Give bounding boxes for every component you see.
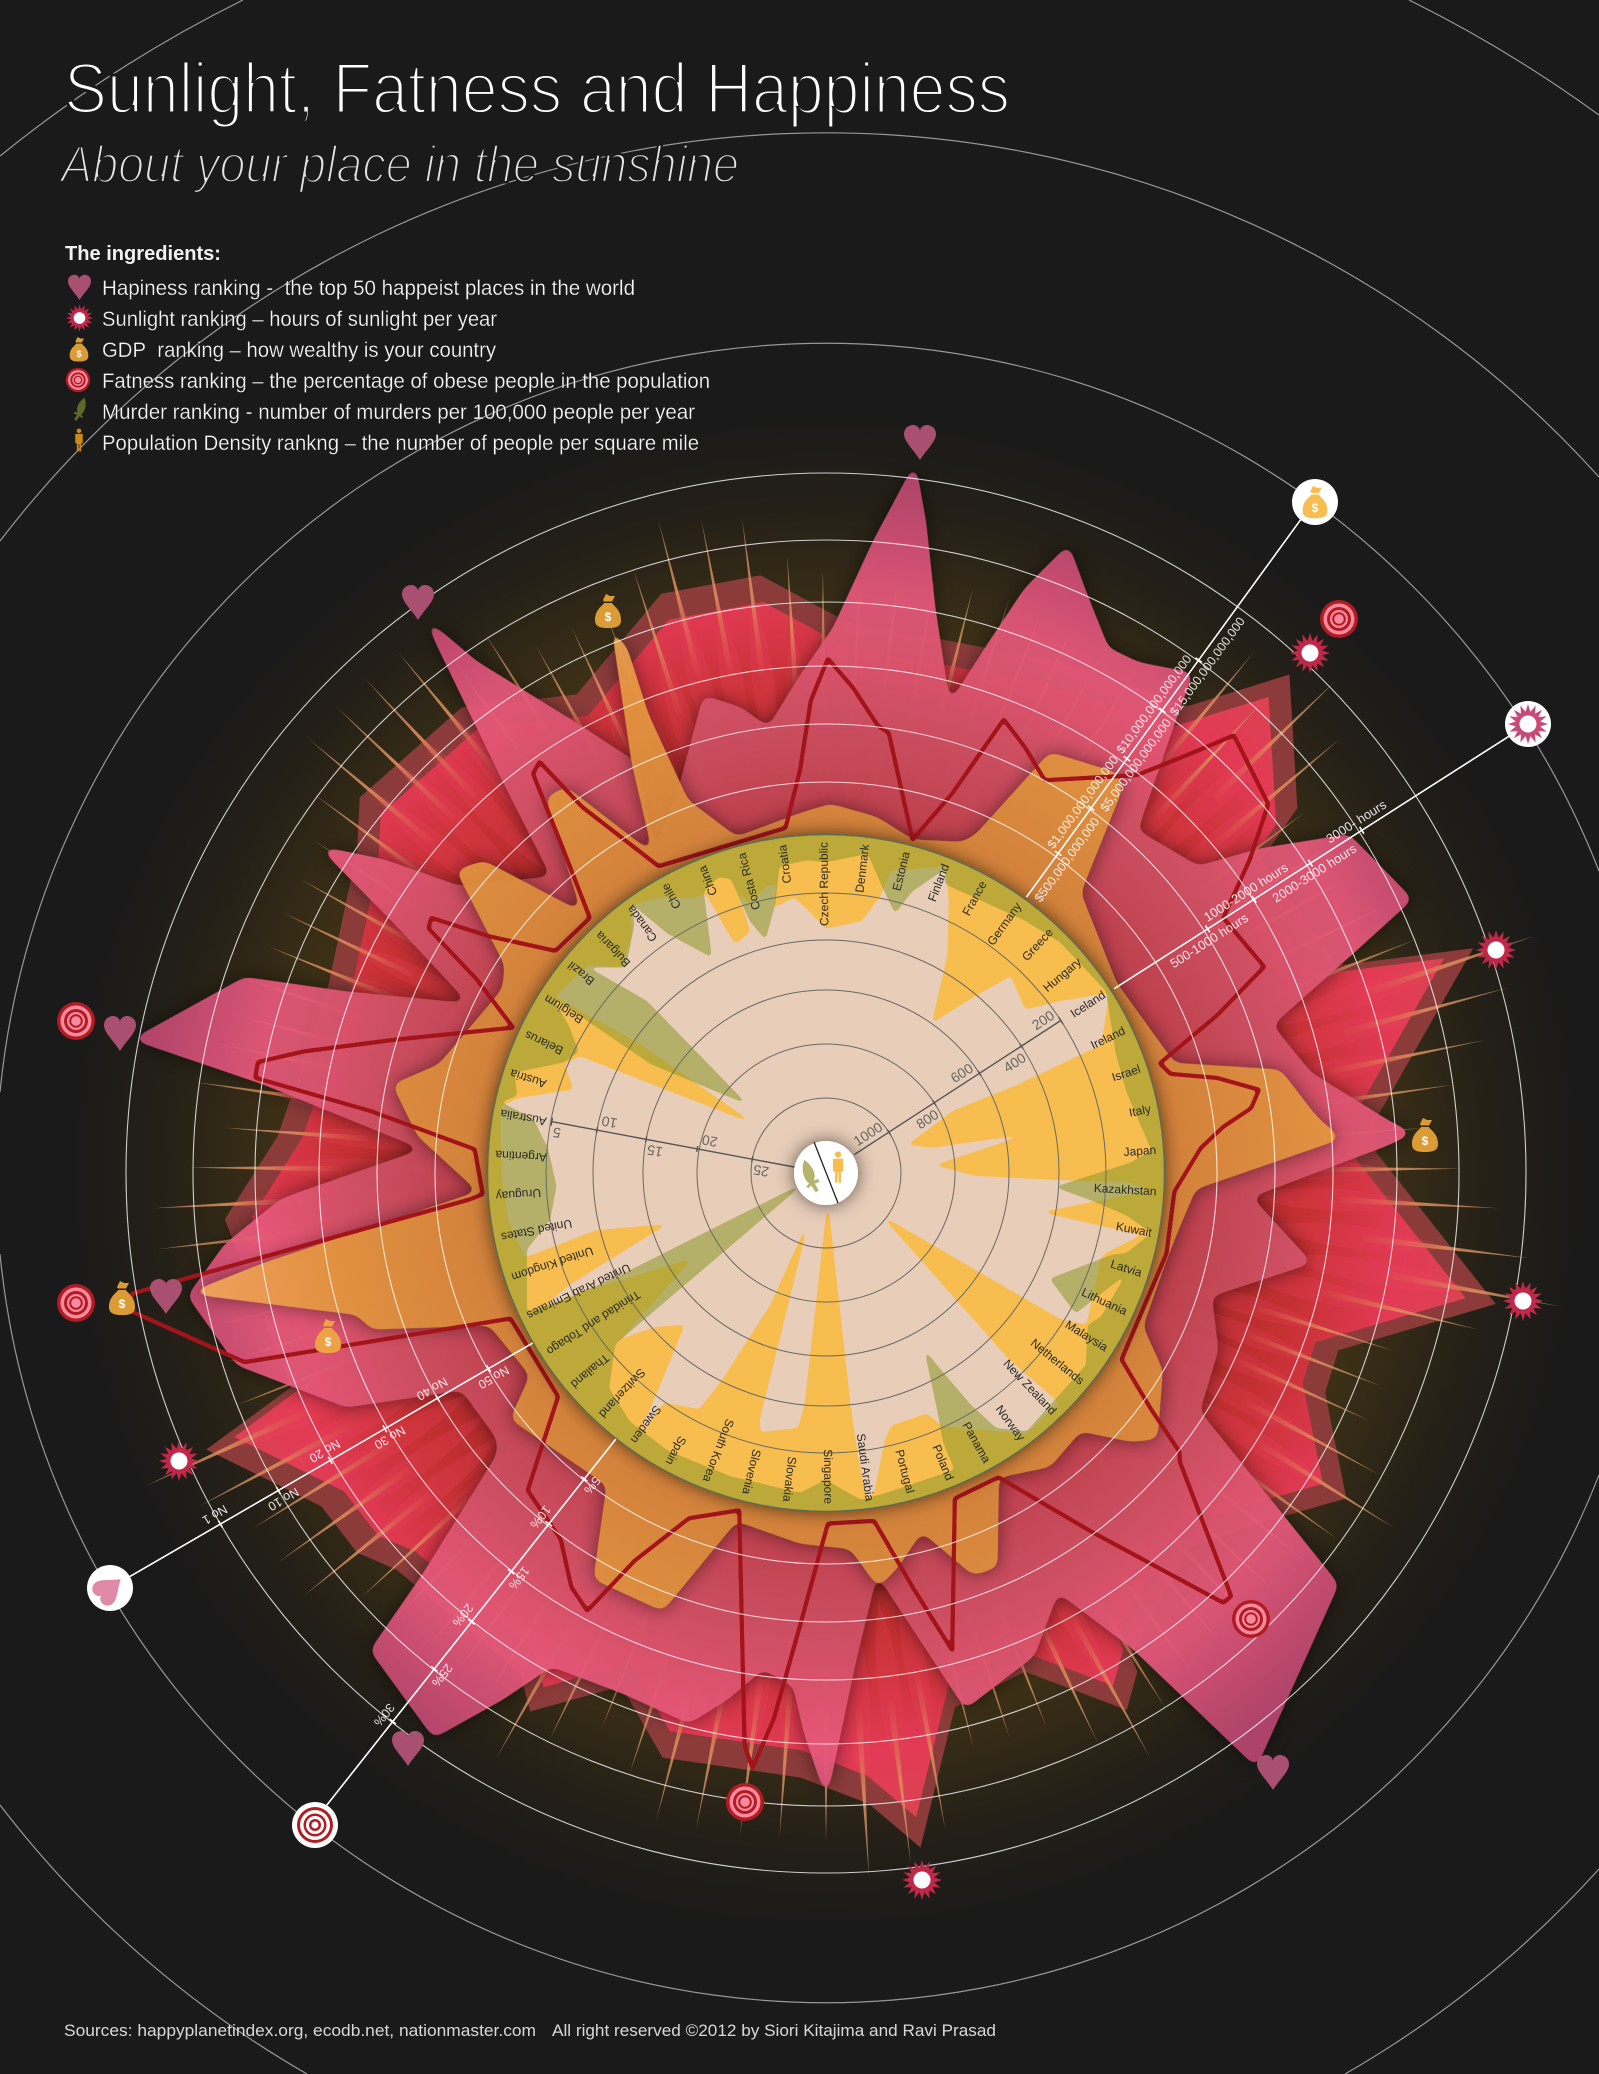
axis badge: money bag: $ [1312, 501, 1319, 515]
fatness axis: 10% [527, 1503, 554, 1531]
country labels: Iceland [1068, 988, 1108, 1021]
axis badge: sun [1505, 701, 1551, 747]
concentric scale rings [126, 473, 1526, 1873]
fatness line [127, 659, 1268, 1768]
country labels: Lithuania [1079, 1285, 1130, 1318]
happiness axis: No 30 [372, 1423, 408, 1452]
sunlight axis: 2000-3000 hours [1270, 841, 1359, 906]
country labels: Spain [662, 1434, 689, 1468]
country labels: Ireland [1088, 1024, 1128, 1052]
GDP axis: $1,000,000,000,000 [1045, 753, 1121, 851]
legend: density row: Population Density rankng – the number of people per square mile [102, 432, 699, 455]
axis badge: heart [87, 1565, 133, 1611]
sunlight axis: 3000- hours [1323, 797, 1389, 846]
country labels: Slovenia [739, 1448, 764, 1496]
country labels: Israel [1110, 1062, 1142, 1084]
legend: sunlight row: Sunlight ranking – hours of sunlight per year [102, 308, 497, 331]
icon: heart upper left [402, 585, 434, 620]
country labels: New Zealand [1000, 1357, 1059, 1417]
country labels: Argentina [495, 1148, 547, 1164]
icon: money bag left: $ [119, 1297, 126, 1311]
country labels: Latvia [1109, 1257, 1144, 1280]
fatness axis: 15% [506, 1564, 532, 1592]
country labels: Belgium [542, 992, 586, 1027]
sunlight axis: 500-1000 hours [1167, 910, 1251, 971]
icon: heart left [104, 1016, 136, 1051]
legend heading: The ingredients: [65, 243, 221, 265]
legend: fatness row: Fatness ranking – the percentage of obese people in the population [102, 370, 710, 393]
country labels: France [959, 878, 990, 918]
icon: sun upper right [1290, 633, 1330, 673]
country labels: Denmark [852, 843, 872, 893]
country labels: Greece [1019, 925, 1056, 964]
icon: money bag lower left [315, 1319, 341, 1353]
icon: target bottom [726, 1783, 764, 1821]
country labels: Chile [658, 880, 684, 911]
centre badge with sword and person [794, 1141, 858, 1205]
happiness axis: No 50 [476, 1363, 512, 1392]
country labels: Czech Republic [817, 842, 831, 926]
country labels: United Kingdom [510, 1244, 595, 1284]
axis badge: target [292, 1802, 338, 1848]
murder axis: 25 [752, 1162, 770, 1180]
GDP axis: $10,000,000,000,000 [1114, 652, 1195, 756]
icon: heart bottom right [1257, 1755, 1289, 1790]
country labels: Belarus [523, 1028, 565, 1058]
footer: sources: Sources: happyplanetindex.org, ecodb.net, nationmaster.com [64, 2022, 536, 2040]
fatness axis: 20% [450, 1601, 476, 1629]
country labels [495, 842, 1157, 1504]
icon: heart lower left [150, 1279, 182, 1314]
murder axis: 20 [700, 1132, 719, 1150]
sunlight axis: 1000-2000 hours [1201, 860, 1291, 924]
subtitle: About your place in the sunshine [58, 136, 739, 194]
country labels: Croatia [775, 844, 794, 884]
icon: money bag upper left: $ [605, 610, 612, 624]
legend: murder row: Murder ranking - number of murders per 100,000 people per year [102, 401, 695, 424]
country labels: Slovakia [780, 1456, 799, 1503]
icon: sun right upper [1476, 930, 1516, 970]
legend: GDP row: GDP ranking – how wealthy is your country [102, 339, 496, 362]
murder axis: 5 [551, 1124, 562, 1141]
GDP layer: orange shape [188, 622, 1341, 1611]
country labels: Sweden [628, 1403, 664, 1446]
inner disc rings [546, 893, 1106, 1453]
legend: GDP row: $ [76, 349, 82, 359]
fatness axis: 30% [371, 1701, 397, 1729]
icon: sun lower left [159, 1441, 199, 1481]
country labels: Brazil [565, 958, 597, 988]
population density axis: 600 [948, 1060, 976, 1086]
axis badge: money bag [1292, 479, 1338, 525]
country labels: South Korea [700, 1417, 737, 1484]
happiness axis: No 10 [265, 1485, 301, 1514]
country labels: Italy [1128, 1102, 1152, 1120]
country labels: United States [500, 1216, 573, 1244]
title: Sunlight, Fatness and Happiness [64, 50, 1010, 129]
icon: sun right lower [1503, 1281, 1543, 1321]
happiness axis: No 1 [200, 1502, 230, 1527]
fatness axis [309, 1428, 629, 1821]
sunlight spikes [139, 517, 1562, 1878]
happiness axis [114, 1327, 541, 1595]
GDP axis: $500,000,000,000 [1032, 815, 1102, 905]
icon: money bag lower left: $ [325, 1335, 332, 1349]
population density axis: 1000 [850, 1119, 885, 1149]
country labels: Japan [1123, 1143, 1157, 1159]
country labels: Kuwait [1115, 1219, 1153, 1240]
icon: money bag left [109, 1281, 135, 1315]
country labels: Canada [624, 902, 660, 945]
country labels: Singapore [821, 1449, 835, 1504]
icon: sun bottom [902, 1860, 942, 1900]
country labels: Uruguay [495, 1186, 542, 1203]
country labels: Saudi Arabia [854, 1433, 877, 1502]
population density axis [845, 1005, 1071, 1170]
icon: target upper right [1320, 600, 1358, 638]
icon: heart top [904, 425, 936, 460]
country labels: Norway [993, 1403, 1028, 1444]
country labels: Finland [925, 862, 952, 904]
country labels: Switzerland [596, 1366, 648, 1421]
country labels: Poland [930, 1443, 957, 1483]
GDP axis: $15,000,000,000,000 [1167, 615, 1248, 718]
icon: money bag right [1412, 1118, 1438, 1152]
sunlight layer: halo and red shape [206, 575, 1496, 1848]
country labels: Kazakhstan [1093, 1181, 1157, 1198]
murder axis [547, 1104, 798, 1185]
happiness axis: No 40 [414, 1374, 450, 1403]
fatness axis: 25% [429, 1661, 455, 1689]
happiness axis: No 20 [307, 1436, 343, 1465]
icon: money bag upper left [595, 594, 621, 628]
country labels: Estonia [890, 850, 913, 892]
country labels: Netherlands [1028, 1336, 1087, 1388]
legend: happiness row: Hapiness ranking - the top 50 happeist places in the world [102, 277, 635, 300]
footer: credits: All right reserved ©2012 by Siori Kitajima and Ravi Prasad [552, 2022, 996, 2040]
country labels: Thailand [568, 1351, 612, 1391]
murder axis: 15 [646, 1142, 664, 1160]
happiness layer: pink shape [132, 463, 1412, 1799]
country labels: Portugal [892, 1448, 917, 1495]
icon: target left [57, 1002, 95, 1040]
country labels: Hungary [1040, 955, 1084, 995]
central disc [474, 821, 1178, 1525]
GDP axis [1013, 506, 1318, 908]
icon: money bag right: $ [1422, 1134, 1429, 1148]
country labels: Trinidad and Tobago [544, 1287, 643, 1358]
icon: heart bottom left [392, 1731, 424, 1766]
population density axis: 400 [1000, 1049, 1029, 1076]
country labels: Germany [984, 900, 1024, 948]
country labels: United Arab Emirates [524, 1261, 633, 1322]
country labels: Australia [499, 1106, 548, 1129]
country labels: Costa Rica [735, 851, 763, 912]
country labels: China [695, 863, 720, 898]
icon: target lower left [57, 1284, 95, 1322]
GDP axis: $5,000,000,000,000 [1097, 716, 1174, 814]
country labels: Austria [508, 1066, 548, 1091]
country labels: Panama [960, 1419, 994, 1466]
fatness axis: 5% [581, 1474, 603, 1497]
country labels: Malaysia [1063, 1317, 1111, 1354]
population density axis: 200 [1029, 1007, 1057, 1033]
icon: target bottom right [1232, 1600, 1270, 1638]
murder axis: 10 [600, 1113, 619, 1132]
sunlight axis [1104, 720, 1520, 1004]
country labels: Bulgaria [592, 928, 633, 970]
population density axis: 800 [913, 1106, 942, 1132]
